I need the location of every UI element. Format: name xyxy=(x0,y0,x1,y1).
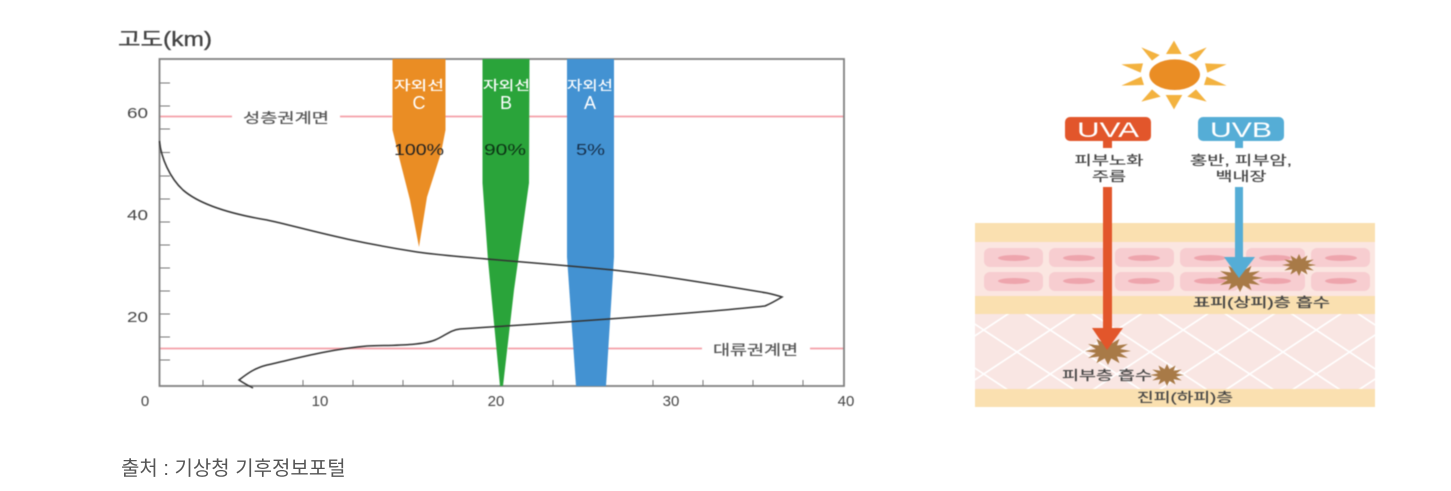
band labels: 자외선 xyxy=(394,78,444,93)
UVA effects text xyxy=(1074,153,1144,184)
axes frame and ticks xyxy=(160,59,844,386)
x axis numbers xyxy=(141,393,854,410)
UVA badge: UVA xyxy=(1077,119,1139,142)
UVB effects text xyxy=(1190,153,1292,184)
band labels: 자외선 xyxy=(483,78,530,93)
arrow: UVA to dermis xyxy=(1092,187,1123,350)
x axis numbers: 20 xyxy=(488,393,504,410)
band labels: 5% xyxy=(576,142,605,159)
epidermis absorption label: 표피(상피)층 흡수 xyxy=(1193,295,1330,310)
panel: skin absorption diagram xyxy=(975,41,1375,407)
ozone curve xyxy=(160,141,782,388)
UVA effects text: 주름 xyxy=(1092,169,1126,184)
tropopause label: 대류권계면 xyxy=(713,342,798,358)
x axis numbers: 40 xyxy=(838,393,854,410)
band labels: B xyxy=(500,93,512,113)
icon: sun xyxy=(1121,41,1227,109)
band labels: 90% xyxy=(484,142,526,159)
x axis numbers: 0 xyxy=(141,393,149,410)
band labels xyxy=(394,78,613,159)
y axis title: 고도(km) xyxy=(118,29,212,51)
y axis numbers: 40 xyxy=(127,207,148,224)
UVB badge: UVB xyxy=(1210,119,1272,142)
band labels: 자외선 xyxy=(567,78,613,93)
band labels: A xyxy=(584,93,596,113)
stratopause label: 성층권계면 xyxy=(243,110,329,126)
UVA effects text: 피부노화 xyxy=(1074,153,1144,168)
source note: 출처 : 기상청 기후정보포털 xyxy=(121,458,346,480)
dermis absorption label: 피부층 흡수 xyxy=(1062,368,1152,383)
skin layers xyxy=(975,223,1375,407)
band labels: 100% xyxy=(394,142,444,159)
band: UV-B xyxy=(482,59,530,386)
UVB effects text: 백내장 xyxy=(1216,169,1267,184)
y axis numbers: 20 xyxy=(127,309,148,326)
y axis numbers xyxy=(127,105,148,326)
UVA badge xyxy=(1065,117,1151,148)
UVB badge xyxy=(1198,117,1284,148)
stratopause line xyxy=(160,116,844,118)
icon: absorption burst epidermis small xyxy=(1282,254,1316,276)
dermis layer label: 진피(하피)층 xyxy=(1137,390,1233,405)
band: UV-C xyxy=(392,59,446,247)
x axis numbers: 30 xyxy=(663,393,679,410)
band: UV-A xyxy=(567,59,614,386)
x axis numbers: 10 xyxy=(312,393,328,410)
band labels: C xyxy=(412,93,426,113)
arrow: UVB to epidermis xyxy=(1224,187,1255,278)
icon: absorption burst dermis small xyxy=(1150,364,1184,386)
icon: absorption burst epidermis xyxy=(1217,264,1263,292)
y axis numbers: 60 xyxy=(127,105,148,122)
epidermis cells xyxy=(984,248,1370,291)
icon: absorption burst dermis xyxy=(1085,337,1131,365)
UVB effects text: 홍반, 피부암, xyxy=(1190,153,1292,168)
panel: ozone altitude chart xyxy=(118,29,854,410)
tropopause line xyxy=(160,348,844,350)
